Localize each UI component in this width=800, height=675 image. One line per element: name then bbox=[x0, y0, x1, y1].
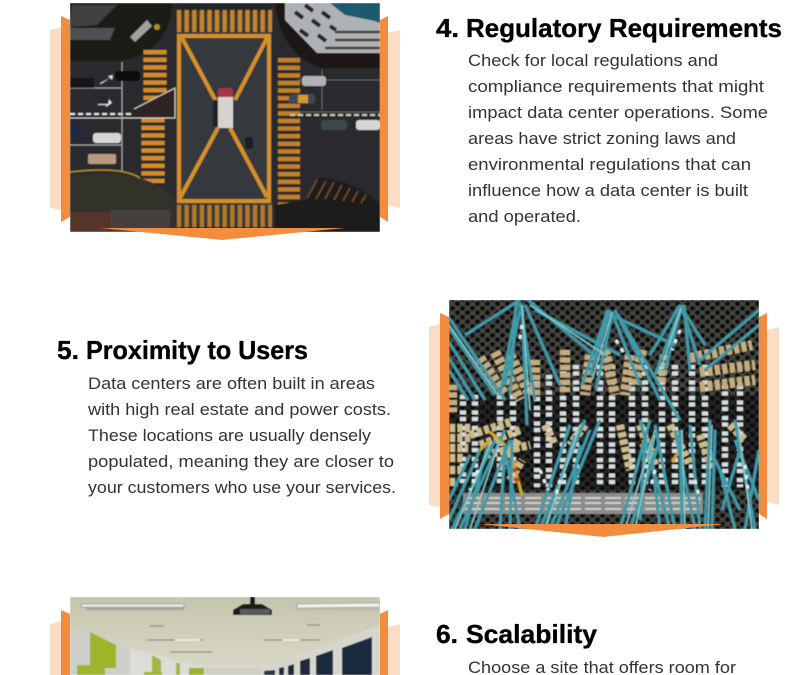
text block: proximity description: your customers who use your services. bbox=[88, 478, 396, 497]
photo frame: orange bottom chevron bbox=[100, 228, 345, 240]
text block: proximity description: Data centers are often built in areas bbox=[88, 374, 375, 393]
text block: proximity description bbox=[87, 374, 396, 497]
section 4: regulatory requirements bbox=[50, 3, 782, 240]
text block: regulatory description: Check for local regulations and bbox=[468, 51, 718, 70]
text block: proximity description: These locations are usually densely bbox=[88, 426, 372, 445]
heading: 4. Regulatory Requirements: 4. bbox=[436, 13, 459, 43]
text block: regulatory description: influence how a data center is built bbox=[468, 181, 748, 200]
text block: proximity description: with high real estate and power costs. bbox=[87, 400, 391, 419]
text block: regulatory description: impact data center operations. Some bbox=[468, 103, 768, 122]
photo: office room with ceiling lights and projector bbox=[70, 597, 380, 675]
section 6: scalability bbox=[50, 597, 736, 675]
heading: 4. Regulatory Requirements: Regulatory Requirements bbox=[466, 13, 782, 43]
photo: network cabling on server rack bbox=[449, 300, 759, 529]
heading: 6. Scalability: 6. bbox=[436, 619, 458, 649]
photo: aerial view of road intersection bbox=[70, 3, 380, 232]
text block: regulatory description: areas have strict zoning laws and bbox=[468, 129, 736, 148]
photo frame: orange side ribbons bbox=[50, 16, 400, 222]
section 5: proximity to users bbox=[57, 300, 779, 537]
heading: 5. Proximity to Users: 5. bbox=[57, 335, 79, 365]
text block: proximity description: populated, meaning they are closer to bbox=[88, 452, 394, 471]
heading: 5. Proximity to Users: Proximity to Users bbox=[86, 335, 308, 365]
text block: regulatory description bbox=[468, 51, 768, 226]
photo frame: orange bottom chevron bbox=[480, 524, 725, 537]
photo frame: orange side ribbons bbox=[429, 313, 779, 519]
photo frame: orange side ribbons bbox=[50, 610, 400, 675]
text block: regulatory description: environmental regulations that can bbox=[468, 155, 751, 174]
heading: 6. Scalability: Scalability bbox=[466, 619, 598, 649]
text block: regulatory description: compliance requirements that might bbox=[468, 77, 764, 96]
text block: regulatory description: and operated. bbox=[468, 207, 581, 226]
